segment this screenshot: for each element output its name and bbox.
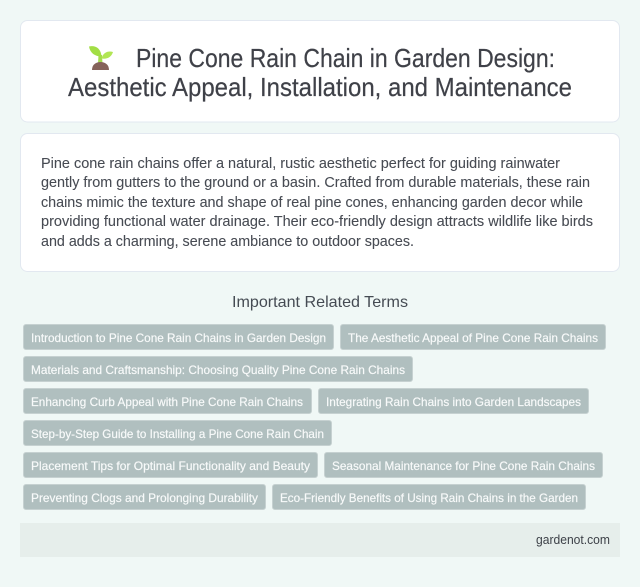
tag: Step-by-Step Guide to Installing a Pine Cone Rain Chain: [31, 427, 324, 441]
tag: Preventing Clogs and Prolonging Durability: [31, 491, 258, 505]
tag: [24, 356, 412, 382]
tag: The Aesthetic Appeal of Pine Cone Rain Chains: [348, 331, 598, 345]
description text: gently from gutters to the ground or a basin. Crafted from durable materials, these rain: [41, 175, 590, 191]
tag: [324, 452, 602, 478]
tag: [24, 484, 266, 510]
icon: seedling: [89, 46, 113, 70]
title: [68, 43, 572, 102]
tag: [24, 388, 312, 414]
heading: related terms: Important Related Terms: [232, 294, 408, 311]
tag: Eco-Friendly Benefits of Using Rain Chains in the Garden: [280, 491, 578, 505]
title: Pine Cone Rain Chain in Garden Design:: [136, 43, 555, 73]
panel: description card: [20, 134, 620, 272]
tag: [24, 452, 318, 478]
description text: Pine cone rain chains offer a natural, rustic aesthetic perfect for guiding rainwater: [41, 156, 560, 172]
tag: Introduction to Pine Cone Rain Chains in Garden Design: [31, 331, 326, 345]
tag: [24, 420, 332, 446]
tag: Enhancing Curb Appeal with Pine Cone Rain Chains: [31, 395, 303, 409]
footer: gardenot.com: [536, 532, 610, 547]
footer: [20, 523, 620, 557]
description text: providing functional water drainage. Their eco-friendly design attracts wildlife like birds: [41, 214, 593, 230]
description text: and adds a charming, serene ambiance to outdoor spaces.: [41, 234, 414, 250]
description text: chains mimic the texture and shape of real pine cones, enhancing garden decor while: [41, 195, 583, 211]
description text: [41, 156, 593, 250]
tag: Seasonal Maintenance for Pine Cone Rain Chains: [332, 459, 595, 473]
tag: Integrating Rain Chains into Garden Landscapes: [326, 395, 581, 409]
tag: Placement Tips for Optimal Functionality and Beauty: [31, 459, 310, 473]
panel: term tags: [24, 324, 606, 510]
panel: title card: [20, 20, 620, 122]
tag: [318, 388, 588, 414]
title: Aesthetic Appeal, Installation, and Maintenance: [68, 72, 572, 102]
tag: [272, 484, 586, 510]
tag: [24, 324, 334, 350]
tag: [340, 324, 606, 350]
tag: Materials and Craftsmanship: Choosing Quality Pine Cone Rain Chains: [31, 363, 405, 377]
